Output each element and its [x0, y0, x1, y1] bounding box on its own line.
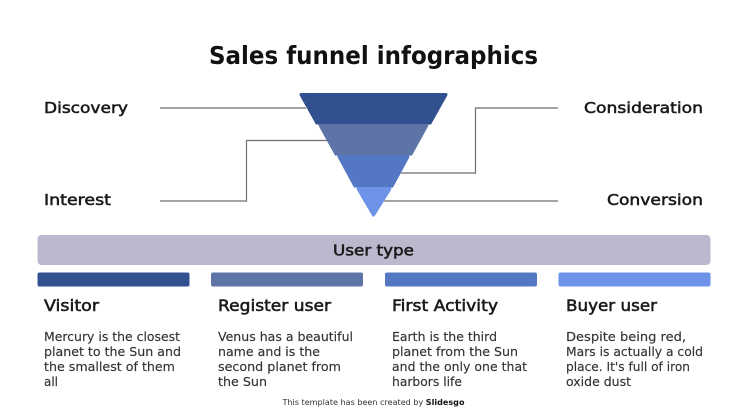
- text: Visitor: all: [44, 375, 58, 389]
- funnel tier 3: [337, 155, 409, 188]
- label: Interest: [44, 140, 331, 209]
- text: Visitor: Mercury is the closest: [44, 330, 180, 344]
- heading: Register user: Register user: [218, 296, 331, 315]
- text: Visitor: planet to the Sun and: [44, 345, 181, 359]
- column: Visitor: [38, 272, 190, 389]
- column: Register user: [211, 272, 363, 389]
- heading: Buyer user: Buyer user: [566, 296, 657, 315]
- title: Sales funnel infographics: [209, 41, 538, 70]
- user type bar: User type: [333, 242, 414, 260]
- text: Visitor: the smallest of them: [44, 360, 175, 374]
- text: Register user: Venus has a beautiful: [218, 330, 353, 344]
- user type bar: [38, 235, 710, 265]
- heading: Visitor: Visitor: [44, 296, 99, 315]
- text: Register user: name and is the: [218, 345, 320, 359]
- color bar: Buyer user: [558, 272, 710, 286]
- label: Interest: Interest: [44, 191, 111, 209]
- text: Buyer user: Mars is actually a cold: [566, 345, 703, 359]
- funnel: [300, 93, 448, 217]
- text: First Activity: harbors life: [392, 375, 462, 389]
- heading: First Activity: First Activity: [392, 296, 498, 315]
- credit line: This template has been created by Slidesgo: [281, 398, 464, 407]
- text: First Activity: Earth is the third: [392, 330, 497, 344]
- label: Conversion: Conversion: [607, 191, 703, 209]
- label: Consideration: [401, 99, 703, 173]
- text: Register user: second planet from: [218, 360, 341, 374]
- column: First Activity: [385, 272, 537, 389]
- label: Consideration: Consideration: [584, 99, 703, 117]
- column: Buyer user: [558, 272, 710, 389]
- color bar: Visitor: [38, 272, 190, 286]
- funnel tier 2: [318, 124, 428, 156]
- text: Buyer user: oxide dust: [566, 375, 631, 389]
- label: Discovery: Discovery: [44, 99, 128, 117]
- text: Buyer user: place. It's full of iron: [566, 360, 690, 374]
- text: First Activity: and the only one that: [392, 360, 527, 374]
- color bar: First Activity: [385, 272, 537, 286]
- funnel tier 1: [300, 93, 448, 124]
- text: Register user: the Sun: [218, 375, 267, 389]
- funnel tier 4: [357, 187, 391, 217]
- text: First Activity: planet from the Sun: [392, 345, 518, 359]
- text: Buyer user: Despite being red,: [566, 330, 686, 344]
- color bar: Register user: [211, 272, 363, 286]
